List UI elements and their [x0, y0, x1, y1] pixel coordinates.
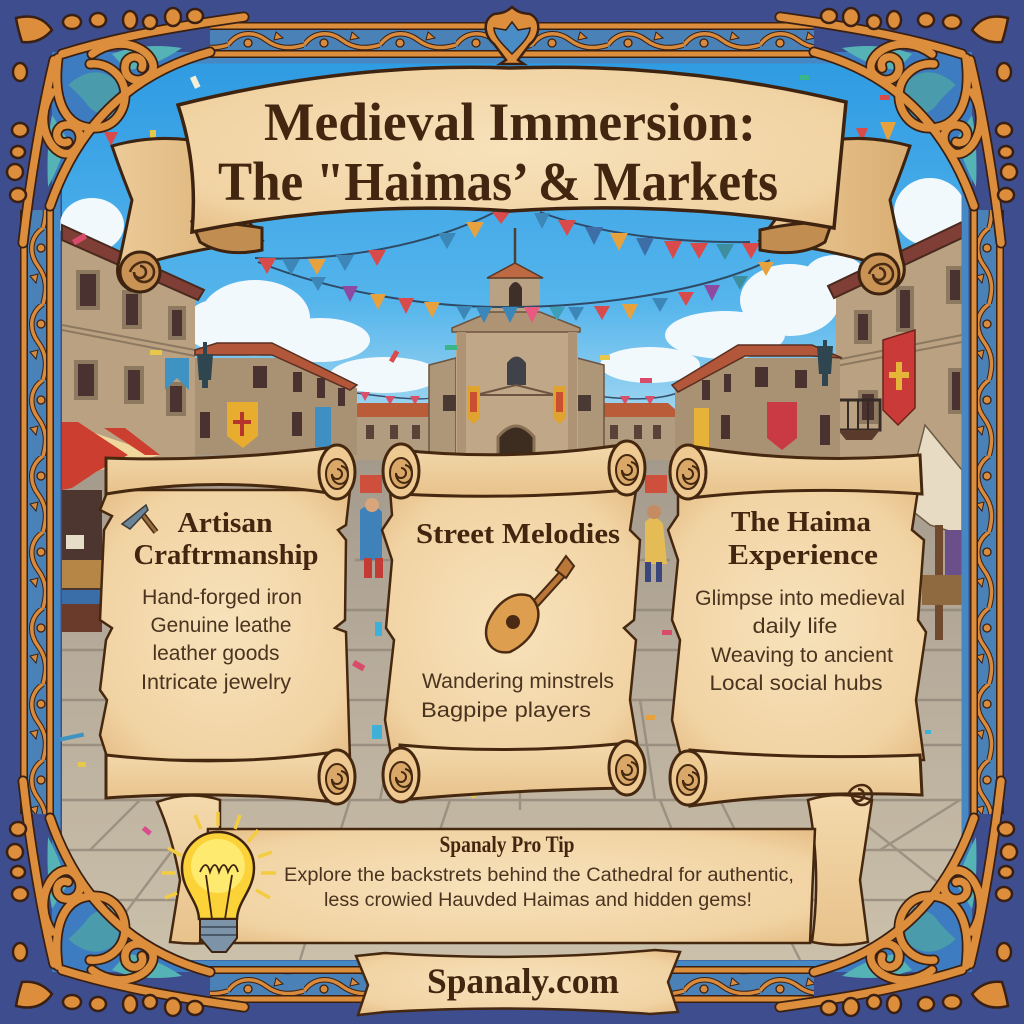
- bottom curl: [319, 750, 355, 804]
- heading: The Haima: [731, 506, 871, 538]
- top curls: [383, 441, 645, 498]
- list: Bagpipe players: [421, 699, 591, 722]
- scroll body: [100, 490, 350, 760]
- right big building: [828, 222, 962, 470]
- corner ornament top-left: [7, 8, 244, 243]
- list: Glimpse into medieval: [695, 587, 905, 610]
- top curl: [319, 445, 355, 499]
- title banner: [112, 67, 910, 294]
- back row of buildings: [346, 403, 684, 460]
- light blue inner stripe: [57, 60, 965, 964]
- icon: light bulb: [162, 812, 276, 952]
- cathedral: [429, 228, 604, 455]
- banner main: [178, 67, 846, 232]
- tip right curl: [848, 785, 872, 805]
- list: Wandering minstrels: [422, 670, 614, 693]
- right mid building: [672, 345, 842, 458]
- frame band right: [976, 210, 997, 814]
- plaza paving: [62, 448, 962, 960]
- tip left roll: [157, 795, 220, 944]
- corner ornament bottom-right: [780, 781, 1017, 1016]
- list: daily life: [752, 615, 838, 638]
- panel: artisan craftsmanship: [100, 445, 355, 804]
- panel: street melodies: [382, 441, 645, 802]
- icon: hammer: [122, 505, 156, 532]
- banner fold left: [192, 222, 262, 253]
- list: Hand-forged iron: [142, 586, 302, 609]
- left mid building: [195, 343, 357, 455]
- heading: Craftrmanship: [134, 539, 318, 571]
- panel: pro tip: [157, 785, 872, 952]
- bottom roll: [400, 743, 628, 800]
- second bunting: [350, 392, 680, 405]
- top roll: [106, 447, 335, 494]
- heading: Artisan: [178, 507, 272, 539]
- scroll body: [382, 490, 640, 760]
- footer ribbon: [356, 950, 680, 1015]
- website: Spanaly.com: [427, 961, 619, 1001]
- list: leather goods: [152, 642, 280, 665]
- corner ornament bottom-left: [7, 781, 244, 1016]
- frame band left: [27, 210, 48, 814]
- bottom curls: [383, 741, 645, 802]
- bottom roll: [106, 752, 335, 802]
- banner curl right: [859, 254, 899, 294]
- banner tail right: [760, 138, 910, 290]
- top roll: [690, 446, 922, 498]
- icon: lute: [486, 556, 574, 652]
- corner ornament top-right: [780, 8, 1017, 243]
- banner tail left: [112, 138, 262, 290]
- top centre crest: [486, 7, 538, 64]
- frame band top: [210, 29, 814, 51]
- white market tent: [905, 425, 962, 640]
- banner curl left: [120, 252, 160, 292]
- list: Local social hubs: [710, 672, 882, 695]
- sky: [62, 62, 962, 462]
- tip body: [200, 829, 815, 943]
- clouds: [60, 178, 966, 393]
- bunting strings: [104, 122, 896, 323]
- ribbon shape: [356, 950, 680, 1015]
- street lamps: [197, 340, 833, 388]
- frame band bottom: [210, 973, 814, 997]
- top roll: [400, 444, 628, 496]
- top curl: [670, 445, 706, 499]
- title line 1: Medieval Immersion:: [264, 92, 756, 152]
- heading: Street Melodies: [416, 518, 620, 550]
- tip right roll: [808, 795, 872, 945]
- scroll body: [668, 490, 926, 760]
- tip text: less crowied Hauvded Haimas and hidden gems!: [324, 890, 752, 911]
- banner fold right: [760, 222, 832, 253]
- market awning and stall: [62, 422, 160, 632]
- title line 2: The "Haimas’ & Markets: [218, 151, 778, 212]
- heading: Experience: [728, 539, 878, 571]
- illustrated market square scene: [60, 62, 966, 960]
- confetti: [60, 70, 931, 836]
- bottom curl: [670, 751, 706, 805]
- tip text: Explore the backstrets behind the Cathedral for authentic,: [284, 865, 794, 886]
- list: Weaving to ancient: [711, 644, 893, 667]
- crowd figures: [360, 475, 667, 582]
- panel: the haima experience: [668, 445, 926, 806]
- bottom roll: [690, 750, 922, 806]
- list: Intricate jewelry: [141, 671, 292, 694]
- list: Genuine leathe: [150, 614, 292, 637]
- left big building: [62, 225, 204, 470]
- tip heading: Spanaly Pro Tip: [440, 832, 574, 857]
